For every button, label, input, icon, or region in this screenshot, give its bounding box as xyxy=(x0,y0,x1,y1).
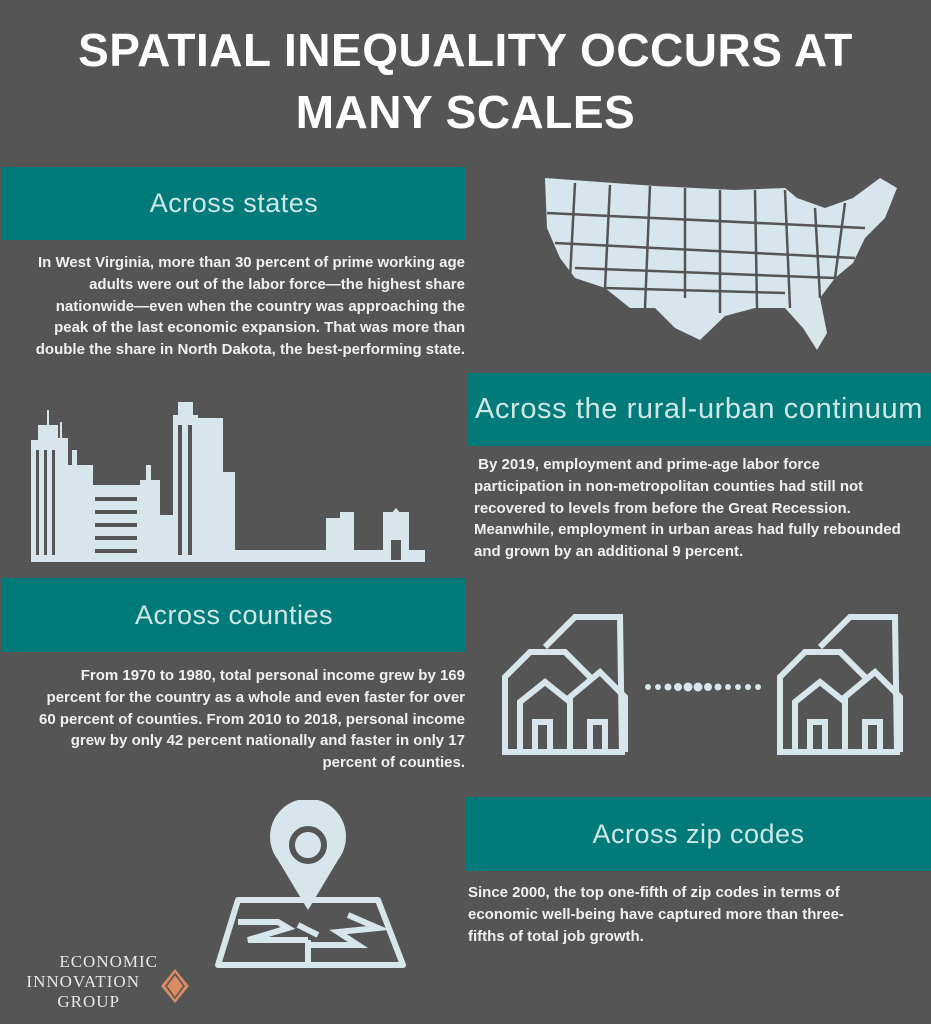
logo: GROUP xyxy=(57,992,120,1011)
text: counties: From 1970 to 1980, total personal income grew by 169 xyxy=(81,667,465,684)
text: rural-urban: Meanwhile, employment in urban areas had fully rebounded xyxy=(474,521,901,538)
text: zip codes: Since 2000, the top one-fifth of zip codes in terms of xyxy=(468,884,840,901)
text: zip codes xyxy=(468,884,844,945)
text: rural-urban: By 2019, employment and prime-age labor force xyxy=(478,456,820,473)
text: across states: adults were out of the labor force—the highest share xyxy=(89,276,465,293)
heading: zip codes xyxy=(466,797,931,871)
text: across states: peak of the last economic expansion. That was more than xyxy=(54,319,465,336)
icon: houses with dots xyxy=(502,614,903,755)
text: rural-urban: and grown by an additional 9 percent. xyxy=(474,543,743,560)
title xyxy=(78,24,853,138)
icon: city to rural xyxy=(31,402,425,562)
text: counties: percent of counties. xyxy=(322,754,465,771)
text: across states: nationwide—even when the country was approaching the xyxy=(56,298,465,315)
text: rural-urban: recovered to levels from before the Great Recession. xyxy=(474,500,851,517)
icon: map pin xyxy=(215,800,406,968)
text: zip codes: fifths of total job growth. xyxy=(468,928,644,945)
text: across states: double the share in North Dakota, the best-performing state. xyxy=(36,341,465,358)
text: rural-urban: participation in non-metropolitan counties had still not xyxy=(474,478,863,495)
text: zip codes: economic well-being have captured more than three- xyxy=(468,906,844,923)
heading: across states: Across states xyxy=(150,188,318,218)
icon: US map xyxy=(545,178,897,350)
heading: counties xyxy=(2,578,466,652)
logo: INNOVATION xyxy=(26,972,140,991)
text: rural-urban xyxy=(474,456,901,560)
heading: counties: Across counties xyxy=(135,600,333,630)
heading: rural-urban xyxy=(467,373,931,446)
logo: ECONOMIC xyxy=(59,952,158,971)
title: SPATIAL INEQUALITY OCCURS AT xyxy=(78,24,853,76)
logo xyxy=(26,952,189,1011)
text: counties: 60 percent of counties. From 2010 to 2018, personal income xyxy=(39,711,465,728)
text: across states: In West Virginia, more than 30 percent of prime working age xyxy=(38,254,465,271)
text: across states xyxy=(36,254,465,358)
heading: rural-urban: Across the rural-urban continuum xyxy=(475,393,923,425)
text: counties: percent for the country as a whole and even faster for over xyxy=(47,689,465,706)
text: counties xyxy=(39,667,465,771)
heading: across states xyxy=(2,167,466,240)
title: MANY SCALES xyxy=(296,86,635,138)
heading: zip codes: Across zip codes xyxy=(592,818,805,848)
text: counties: grew by only 42 percent nationally and faster in only 17 xyxy=(71,732,465,749)
